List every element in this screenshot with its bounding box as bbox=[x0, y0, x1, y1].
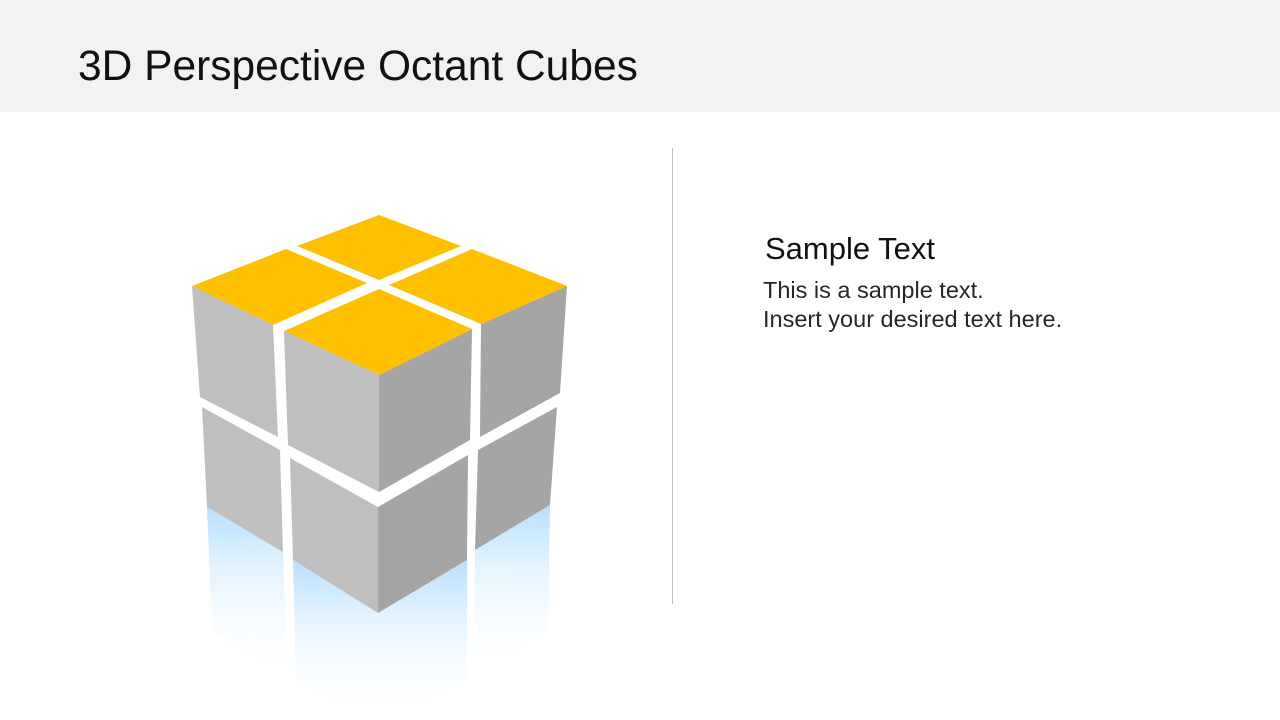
upper cubes bbox=[192, 286, 567, 492]
text block body bbox=[763, 277, 1062, 332]
lower cubes bbox=[202, 407, 557, 613]
title: 3D Perspective Octant Cubes bbox=[78, 43, 638, 90]
header bar bbox=[0, 0, 1280, 112]
reflection bbox=[207, 505, 550, 720]
divider bbox=[672, 148, 673, 604]
text block heading: Sample Text bbox=[765, 231, 935, 266]
text block body: This is a sample text. bbox=[763, 277, 984, 303]
top yellow tiles bbox=[192, 215, 567, 375]
text block body: Insert your desired text here. bbox=[763, 306, 1062, 332]
